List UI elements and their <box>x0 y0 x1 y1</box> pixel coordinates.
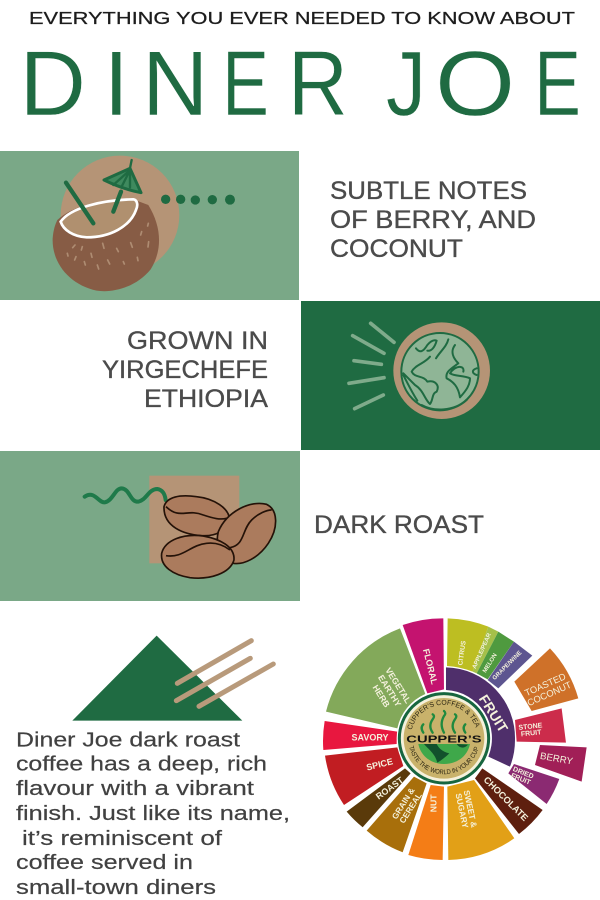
wheel labels: STONE <box>518 722 543 732</box>
chart: coffee flavour wheel <box>323 618 587 860</box>
wheel labels: VEGETAL <box>383 666 413 706</box>
title: Diner Joe: I <box>104 33 129 135</box>
wheel labels: CEREAL <box>397 791 424 825</box>
wheel labels: FRUIT <box>476 692 511 735</box>
wheel labels: BERRY <box>539 751 574 768</box>
text: origin: YIRGECHEFE <box>102 356 268 384</box>
panel: origin <box>301 301 600 450</box>
title: Diner Joe: J <box>386 33 426 135</box>
wheel labels: SPICE <box>365 756 394 773</box>
wheel labels: SAVORY <box>352 732 388 742</box>
wheel labels: ROAST <box>374 775 406 802</box>
title: Diner Joe <box>20 32 581 135</box>
text: description: finish. Just like its name, <box>16 803 290 825</box>
wheel labels <box>352 632 574 830</box>
wheel labels: DRIED <box>512 766 534 781</box>
title: Diner Joe: N <box>142 33 208 135</box>
wheel labels: HERB <box>371 683 392 709</box>
text: origin: GROWN IN <box>127 327 268 355</box>
title: kicker: EVERYTHING YOU EVER NEEDED TO KNOW ABOUT <box>29 8 575 28</box>
logo: Cupper's: CUPPER’S COFFEE & TEA <box>408 700 480 730</box>
wheel labels: CITRUS <box>457 640 468 666</box>
wheel labels: COCONUT <box>526 680 573 708</box>
text: flavour notes: COCONUT <box>330 235 463 263</box>
title: Diner Joe: E <box>534 33 581 135</box>
wheel labels: GRAIN & <box>390 786 417 821</box>
wheel labels: GRAPE/WINE <box>492 650 523 682</box>
icon: coffee beans <box>85 476 276 578</box>
title: Diner Joe: O <box>435 32 515 135</box>
text: description: it’s reminiscent of <box>22 828 223 850</box>
panel: flavour notes <box>0 151 299 300</box>
title: Diner Joe: E <box>222 33 269 135</box>
logo: Cupper's: CUPPER’S <box>406 734 482 745</box>
icon: globe <box>349 322 490 419</box>
text: description: coffee served in <box>16 852 193 874</box>
title: Diner Joe: D <box>20 33 86 135</box>
wheel labels: FRUIT <box>510 772 532 787</box>
wheel labels: CHOCOLATE <box>482 775 530 823</box>
text: flavour notes: OF BERRY, AND <box>330 206 536 234</box>
text: flavour notes: SUBTLE NOTES <box>330 177 527 205</box>
wheel labels: MELON <box>482 653 499 674</box>
text: description: flavour with a vibrant <box>16 778 255 800</box>
wheel labels: FRUIT <box>521 729 543 738</box>
icon: triangle with stripes <box>72 636 273 721</box>
icon: coconut drink <box>53 156 235 291</box>
text: description: coffee has a deep, rich <box>16 754 267 776</box>
text: roast: DARK ROAST <box>314 511 484 539</box>
wheel labels: SWEET & <box>462 789 479 828</box>
text: origin: ETHIOPIA <box>144 385 268 413</box>
logo: Cupper's: TASTE THE WORLD IN YOUR CUP <box>410 746 478 774</box>
text: description <box>16 730 290 899</box>
wheel labels: APPLE/PEAR <box>472 632 493 670</box>
text: flavour notes <box>330 177 536 263</box>
wheel labels: SUGARY <box>453 792 471 829</box>
text: description: Diner Joe dark roast <box>16 730 241 752</box>
text: origin <box>102 327 268 413</box>
wheel labels: TOASTED <box>523 671 568 698</box>
title: Diner Joe: R <box>288 32 348 135</box>
panel: roast <box>0 451 300 601</box>
logo: Cupper's <box>396 692 490 784</box>
wheel labels: FLORAL <box>421 648 440 686</box>
wheel labels: NUT <box>429 794 439 812</box>
text: description: small-town diners <box>16 877 216 899</box>
wheel labels: EARTHY <box>376 673 404 709</box>
